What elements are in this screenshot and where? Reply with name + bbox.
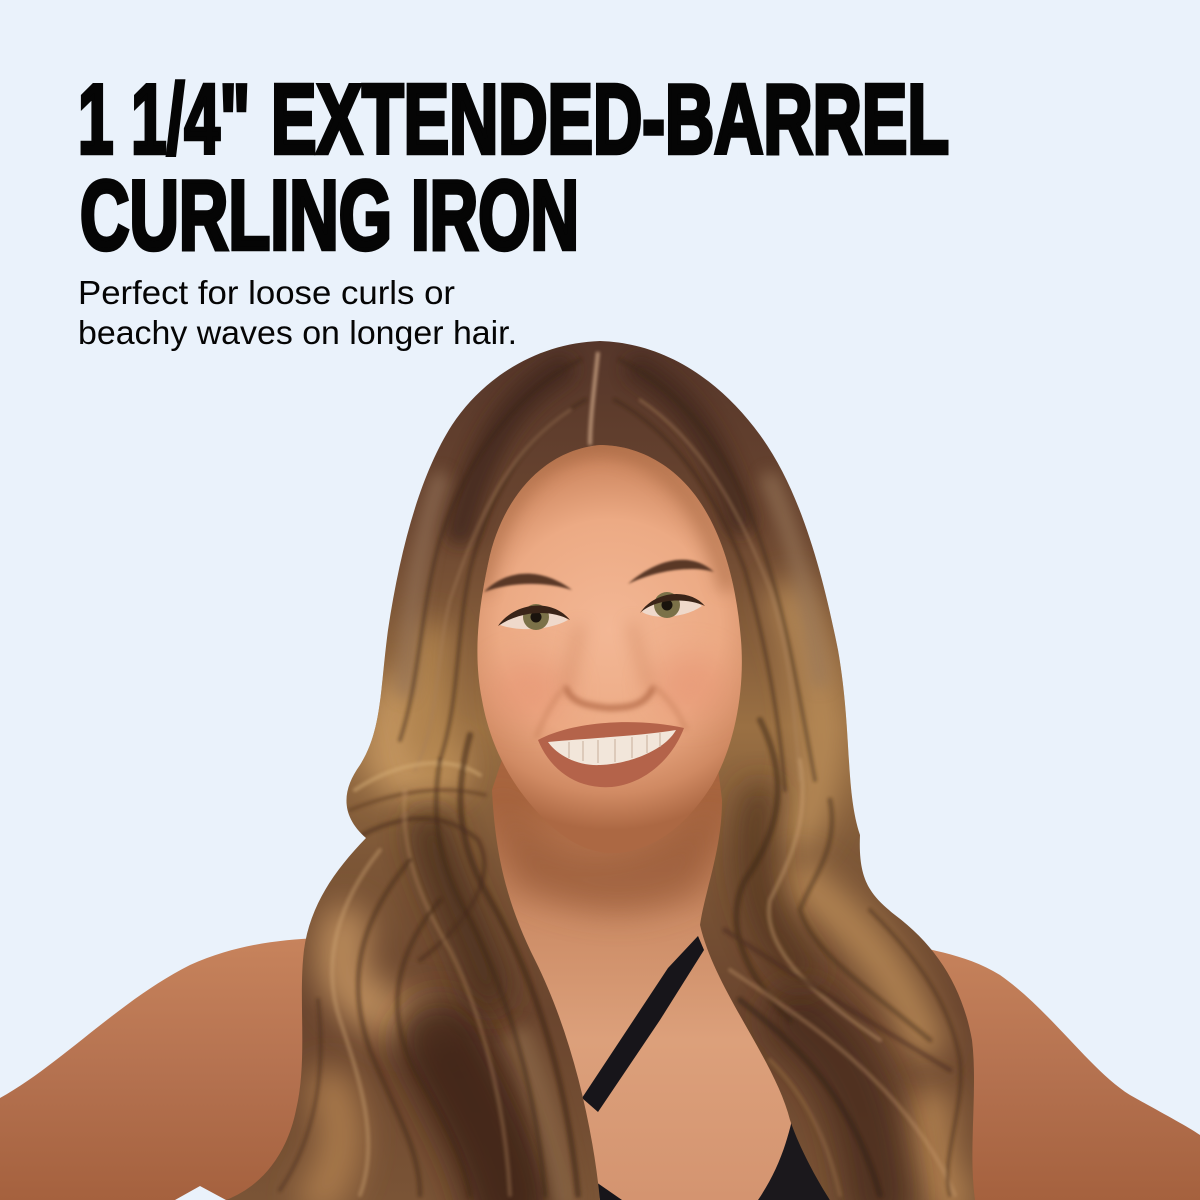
mouth (538, 722, 684, 787)
title: 1 1/4" (78, 64, 250, 174)
face (477, 445, 742, 820)
subtitle text (78, 274, 517, 351)
right eyebrow (628, 560, 714, 584)
subtitle text: Perfect for loose curls or (78, 274, 455, 311)
left eye (498, 604, 570, 630)
right arm and shoulder (880, 935, 1200, 1200)
hair colour zones (320, 370, 950, 1200)
halter top (582, 925, 896, 1200)
title: CURLING (80, 160, 392, 270)
neck and chest (480, 720, 860, 1200)
teeth (569, 733, 660, 763)
title (78, 64, 949, 270)
nose side shade (566, 622, 650, 690)
portrait of smiling woman (0, 330, 1200, 1200)
forehead hairline shade (480, 445, 730, 590)
title: IRON (411, 160, 579, 270)
left eyebrow (484, 574, 572, 592)
subtitle text: beachy waves on longer hair. (78, 314, 517, 351)
smile lines (536, 688, 686, 738)
neck shadow (495, 790, 725, 912)
hair strands (280, 360, 961, 1195)
left arm and shoulder (0, 938, 340, 1200)
hair mass (200, 330, 1000, 1200)
cheek blush (506, 662, 560, 714)
right eye (640, 592, 705, 618)
nose (566, 688, 653, 708)
hair parting (590, 352, 598, 445)
